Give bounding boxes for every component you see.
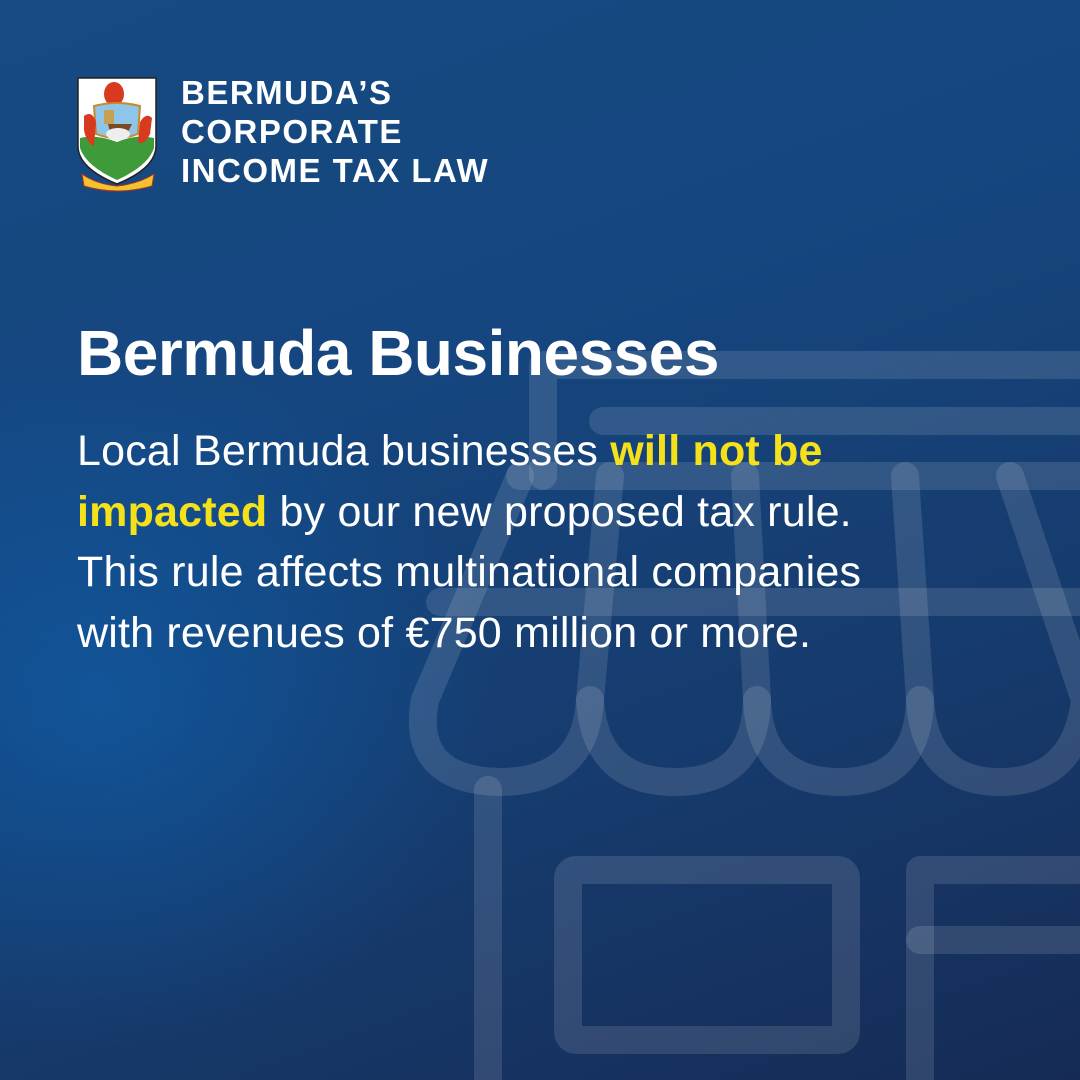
body text: with revenues of €750 million or more. [77,608,811,656]
heading: Bermuda Businesses [77,317,719,389]
icon: Bermuda crest [77,77,157,192]
header title: INCOME TAX LAW [181,152,489,189]
body text: This rule affects multinational companies [77,548,861,596]
body text [76,427,861,656]
body text: Local Bermuda businesses will not be [77,427,823,475]
header title [181,74,489,189]
header title: BERMUDA’S [181,74,393,111]
body text: impacted by our new proposed tax rule. [77,488,852,536]
header title: CORPORATE [181,113,403,150]
